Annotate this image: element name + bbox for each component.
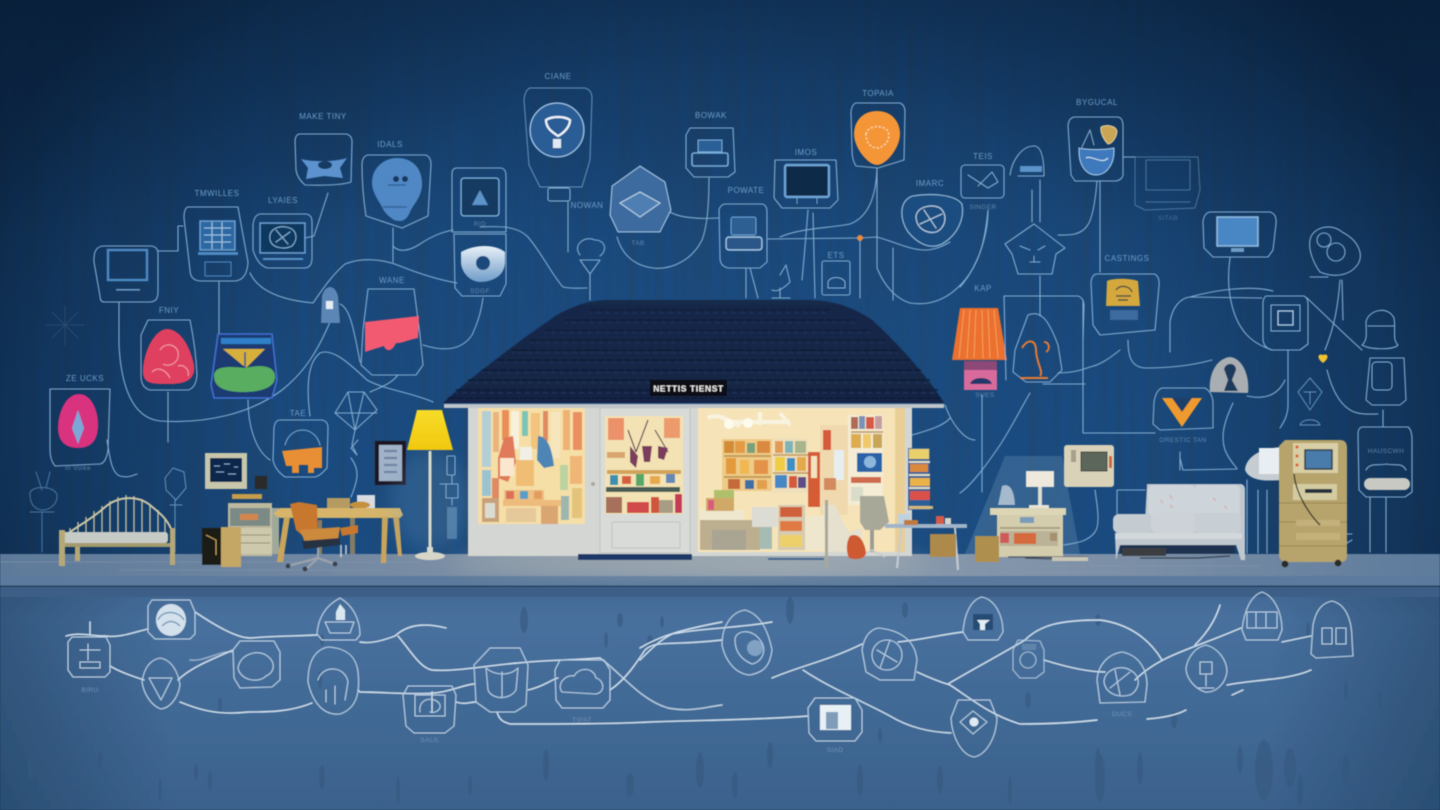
card: dark monitor: IMOS bbox=[795, 148, 817, 157]
roof bbox=[443, 300, 944, 403]
shelf unit orange bbox=[722, 439, 772, 491]
card: brain oval: IMARC bbox=[916, 179, 944, 188]
card: small screen bbox=[822, 251, 850, 295]
card: printer bbox=[686, 111, 735, 177]
lower wall drips bbox=[28, 596, 1423, 806]
card: printer: BOWAK bbox=[695, 111, 727, 120]
card: skull bbox=[362, 140, 431, 228]
lantern with pink shape: WANE bbox=[379, 276, 405, 285]
shop sign bbox=[650, 380, 727, 396]
yellow floor lamp bbox=[390, 410, 470, 560]
card: squiggle bbox=[961, 152, 1004, 211]
card: red blob: FNIY bbox=[159, 306, 179, 315]
hexagon chip bbox=[610, 166, 671, 247]
card: orange triangle bbox=[1153, 388, 1213, 470]
card: blue tv bbox=[1203, 212, 1276, 257]
wall screen bbox=[205, 453, 247, 489]
lower icon: screen bright: SIAD bbox=[827, 747, 843, 754]
card: skull: IDALS bbox=[377, 140, 403, 149]
card: star icon: MAKE TINY bbox=[299, 112, 347, 121]
lower icon: walnut brain bbox=[1097, 652, 1147, 718]
grey hood figure bbox=[1210, 357, 1248, 393]
card: blue bowl: BYGUCAL bbox=[1076, 98, 1118, 107]
card: orange triangle: ORESTIC TAN bbox=[1159, 437, 1207, 444]
store chair and sack bbox=[847, 496, 889, 559]
lantern with pink shape bbox=[361, 276, 423, 375]
card: pink blob: ZE UCKS bbox=[66, 374, 104, 383]
card: monitor one bbox=[94, 246, 158, 302]
shop back counter bbox=[700, 520, 760, 550]
background wall bbox=[0, 0, 1440, 590]
card: brain monitor bbox=[253, 196, 312, 268]
card: neon landscape bbox=[211, 334, 277, 398]
card: dark monitor bbox=[774, 148, 838, 208]
lower icon: screen bright bbox=[808, 698, 862, 754]
card: stacked machine bbox=[719, 186, 767, 268]
sketch post near bench bbox=[165, 468, 186, 552]
lower icon: bulb stand bbox=[1186, 645, 1227, 692]
phone stack sketch bbox=[446, 456, 458, 539]
card: small figure: RID bbox=[474, 221, 486, 228]
faint monitor sketch: SITAB bbox=[1158, 215, 1178, 222]
kiosk bbox=[1245, 440, 1347, 567]
mat bbox=[578, 554, 692, 560]
lower icon: double jar bbox=[1311, 601, 1353, 658]
fascia bbox=[444, 404, 944, 408]
lower icon: table bbox=[963, 597, 1003, 640]
red garment bbox=[808, 452, 820, 507]
orange junction dot bbox=[857, 235, 863, 241]
ceiling fixtures bbox=[708, 412, 790, 426]
hexagon chip: TAB bbox=[631, 240, 645, 247]
card: pink blob bbox=[50, 374, 110, 472]
card: terminal bbox=[184, 189, 248, 281]
card: pill panel bbox=[1358, 427, 1412, 497]
lower icon: jars bbox=[1242, 592, 1282, 640]
side shelf rack bbox=[908, 448, 933, 510]
lower icon: cloud: TIPAT bbox=[572, 717, 592, 724]
lower icon: flame burner bbox=[317, 598, 360, 640]
face umbrella sketch bbox=[1005, 224, 1065, 274]
martini sketch bbox=[571, 201, 605, 300]
lower network connector lines bbox=[66, 605, 1311, 733]
right table bbox=[885, 514, 967, 570]
orange lamp: KAP bbox=[974, 284, 992, 293]
card: pill panel: HAUSCWH bbox=[1368, 448, 1404, 455]
capsule connector bbox=[321, 287, 340, 323]
bench bbox=[59, 495, 175, 566]
framed picture bbox=[375, 441, 406, 485]
copier bbox=[228, 476, 279, 556]
shop sign: NETTIS TIENST bbox=[653, 384, 724, 394]
lower icon: monitor brain bbox=[403, 686, 456, 744]
orange lamp bbox=[952, 284, 1007, 399]
shelf unit blue yellow bbox=[773, 438, 808, 493]
orange balloon card: TOPAIA bbox=[862, 89, 894, 98]
lower icon: triangle bbox=[142, 658, 180, 709]
card: maze square bbox=[1263, 296, 1308, 350]
right side table and lamp bbox=[975, 471, 1088, 562]
card: orange machine: TAE bbox=[290, 409, 306, 418]
lower icon: tulip bbox=[474, 648, 528, 712]
card: glowing circle: CIANE bbox=[545, 72, 571, 81]
card: pink blob: in Voike bbox=[65, 465, 91, 472]
card: small screen: ETS bbox=[827, 251, 845, 260]
bird sketch bbox=[1010, 146, 1044, 176]
brain sketch right bbox=[1310, 227, 1360, 277]
heart bbox=[1318, 355, 1328, 363]
facade bbox=[468, 406, 912, 556]
faint monitor sketch bbox=[1135, 157, 1200, 222]
diamond sketch bbox=[1298, 378, 1322, 425]
lower icon: small terminal bbox=[68, 637, 110, 694]
lower wall bbox=[0, 587, 1440, 810]
orange lamp: SUES bbox=[975, 392, 995, 399]
store interior bbox=[698, 408, 905, 568]
shop building bbox=[443, 300, 944, 576]
orange balloon card bbox=[851, 89, 905, 168]
lower icon: cloud bbox=[555, 660, 610, 724]
card: yellow mic: CASTINGS bbox=[1105, 254, 1149, 263]
card: white bowl bbox=[454, 234, 506, 296]
tall right shelves bbox=[820, 425, 848, 515]
card: brain monitor: LYAIES bbox=[268, 196, 298, 205]
lower icon: eye bbox=[951, 700, 997, 757]
card: orange squiggle lantern bbox=[1004, 296, 1084, 382]
lower icon: cracked sphere bbox=[862, 628, 917, 680]
card: stacked machine: POWATE bbox=[728, 186, 764, 195]
card: white bowl: SDGF bbox=[470, 288, 490, 295]
floor slab bbox=[0, 554, 1440, 587]
lower icon: cloud brain bbox=[233, 641, 280, 688]
parachute sketch bbox=[335, 392, 377, 455]
card: squiggle: TEIS bbox=[973, 152, 993, 161]
faint star sketch bbox=[46, 306, 84, 345]
glass lamp cone bbox=[965, 456, 1080, 554]
card: figure square bbox=[1366, 358, 1406, 405]
lower icon: small terminal: BIRU bbox=[81, 687, 99, 694]
card: yellow mic bbox=[1091, 254, 1159, 335]
card: star icon bbox=[295, 112, 352, 185]
goblet sketch bbox=[772, 265, 790, 298]
card: glowing circle bbox=[524, 72, 592, 201]
lower icon: swirl bbox=[148, 600, 195, 639]
orange chair bbox=[286, 502, 358, 571]
lower icon: ribs bbox=[308, 647, 359, 714]
card: small figure bbox=[452, 168, 506, 232]
card: red blob bbox=[141, 306, 197, 390]
bowl sketch bottom left bbox=[30, 472, 57, 552]
shop door bbox=[591, 408, 690, 553]
left shop window bbox=[478, 408, 585, 524]
card: brain oval bbox=[902, 179, 963, 246]
upper wall connector lines bbox=[107, 157, 1386, 556]
sofa bbox=[1113, 484, 1245, 560]
card: squiggle: SINGER bbox=[969, 204, 997, 211]
cardboard box and dark case bbox=[202, 527, 241, 567]
card: orange machine bbox=[273, 409, 328, 477]
martini sketch: NOWAN bbox=[571, 201, 603, 210]
lower icon: capsule bbox=[1013, 640, 1044, 678]
desk bbox=[273, 495, 403, 563]
lower icon: walnut brain: DUCS bbox=[1112, 711, 1132, 718]
wall monitor bbox=[1064, 445, 1114, 487]
card: blue bowl bbox=[1068, 98, 1123, 181]
shop glow on floor bbox=[450, 548, 930, 576]
robot head sketch bbox=[1362, 310, 1398, 349]
card: terminal: TMWILLES bbox=[195, 189, 239, 198]
lower icon: monitor brain: SALIL bbox=[420, 737, 440, 744]
lower icon: heart brain bbox=[722, 610, 772, 675]
